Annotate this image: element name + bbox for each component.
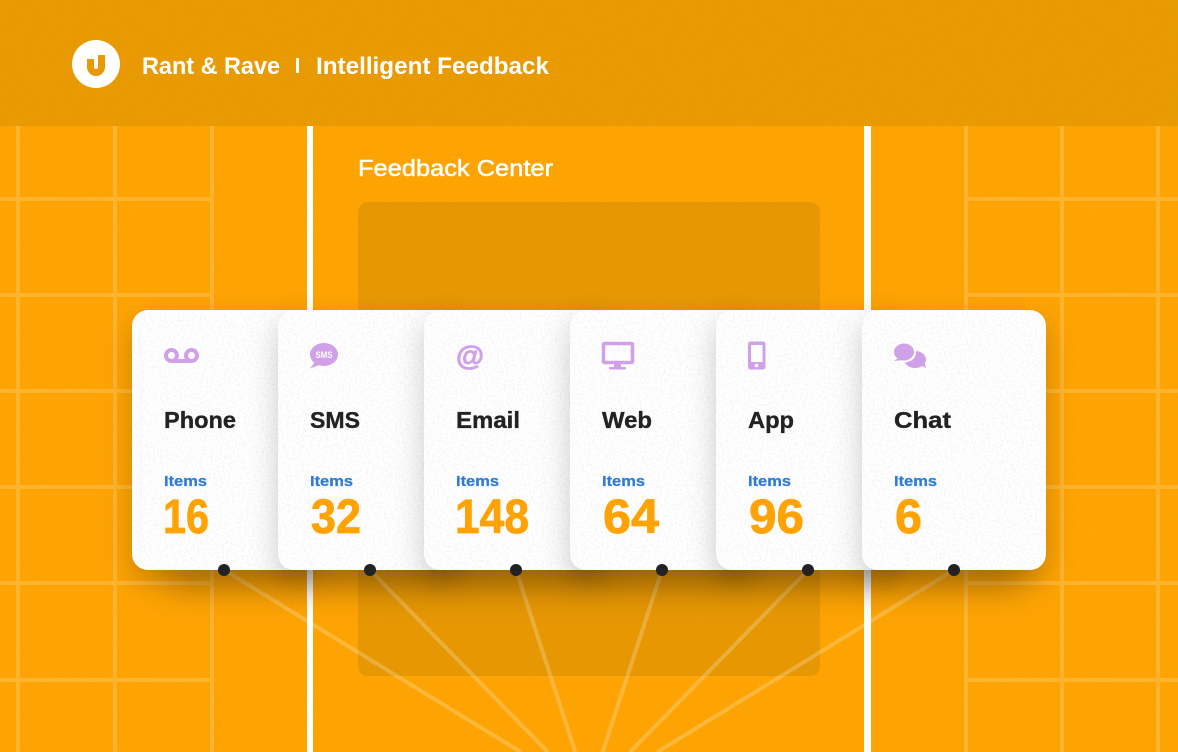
label: Items: Items — [748, 473, 791, 490]
card: Email — [424, 310, 608, 582]
label: Items: Items — [602, 473, 645, 490]
logo — [72, 40, 120, 88]
connector dots — [218, 564, 960, 576]
card: Web — [570, 310, 754, 582]
icon: voicemail — [166, 350, 197, 361]
icon: chat bubbles — [892, 342, 926, 368]
value: 32: 32 — [311, 491, 361, 544]
value: 96: 96 — [749, 491, 804, 544]
icon: sms bubble: SMS — [316, 350, 332, 360]
heading: feedback center: Feedback Center — [358, 155, 553, 181]
header title: Rant & Rave — [142, 53, 280, 80]
value: 6: 6 — [895, 491, 922, 544]
header title: Intelligent Feedback — [316, 53, 550, 80]
header title — [142, 53, 550, 80]
connector lines converging below cards — [224, 570, 954, 752]
icon: mobile phone — [748, 342, 766, 370]
value: 64: 64 — [603, 491, 659, 544]
icon: monitor — [604, 344, 632, 370]
card: Chat — [862, 310, 1046, 582]
label: Phone: Phone — [164, 407, 236, 433]
label: Items: Items — [164, 473, 207, 490]
panel: feedback center backdrop — [358, 202, 820, 676]
value: 16: 16 — [163, 491, 209, 544]
icon: at sign: @ — [456, 340, 484, 371]
label: Items: Items — [310, 473, 353, 490]
white column divider left — [307, 126, 313, 752]
card: App — [716, 310, 900, 582]
card: SMS — [278, 310, 462, 582]
value: 148: 148 — [455, 491, 529, 544]
label: Chat: Chat — [894, 407, 951, 433]
label: SMS: SMS — [310, 407, 360, 433]
card row ground shadow — [170, 520, 1020, 590]
label: Web: Web — [602, 407, 652, 433]
card: Phone — [132, 310, 316, 582]
header band — [0, 0, 1178, 126]
icon: sms bubble — [310, 343, 338, 368]
white column divider right — [864, 126, 871, 752]
label: Email: Email — [456, 407, 520, 433]
label: Items: Items — [456, 473, 499, 490]
label: Items: Items — [894, 473, 937, 490]
label: App: App — [748, 407, 794, 433]
